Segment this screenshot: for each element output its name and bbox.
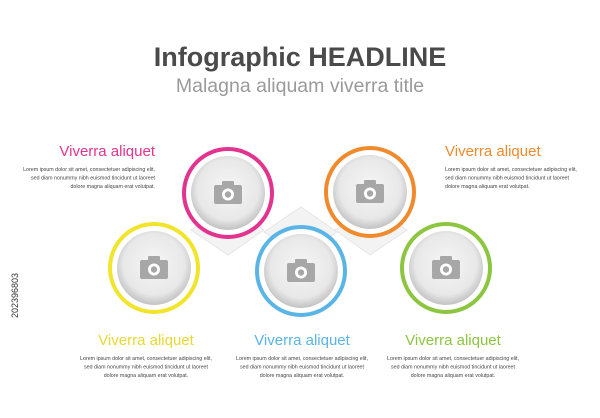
text block: orange bbox=[445, 143, 577, 190]
text block: green: dolore magna aliquam erat volutpat. bbox=[411, 373, 495, 379]
text block: yellow bbox=[80, 332, 212, 379]
text block: pink: Lorem ipsum dolor sit amet, consectetuer adipiscing elit, bbox=[23, 167, 155, 173]
text block: pink bbox=[23, 143, 156, 190]
text block: yellow: Lorem ipsum dolor sit amet, consectetuer adipiscing elit, bbox=[80, 356, 212, 362]
circle: yellow bbox=[110, 224, 198, 312]
circle: pink bbox=[184, 149, 272, 237]
text block: orange: dolore magna aliquam erat volutpat. bbox=[445, 184, 530, 190]
text block: orange: Viverra aliquet bbox=[445, 143, 541, 160]
connector diamonds bbox=[191, 205, 407, 257]
circle: blue bbox=[257, 227, 345, 315]
text block: pink: Viverra aliquet bbox=[59, 143, 156, 160]
text block: blue: sed diam nonummy nibh euismod tincidunt ut laoreet bbox=[240, 364, 365, 370]
text block: blue: Viverra aliquet bbox=[254, 332, 351, 349]
text block: pink: sed diam nonummy nibh euismod tincidunt ut laoreet bbox=[31, 176, 156, 182]
text block: orange: sed diam nonummy nibh euismod tincidunt ut laoreet bbox=[445, 176, 569, 182]
watermark id: 202396803 bbox=[10, 273, 20, 318]
text block: green: Viverra aliquet bbox=[405, 332, 502, 349]
title: Infographic HEADLINE bbox=[154, 42, 446, 72]
text block: yellow: sed diam nonummy nibh euismod tincidunt ut laoreet bbox=[84, 364, 209, 370]
circle: green bbox=[402, 224, 490, 312]
text block: blue: dolore magna aliquam erat volutpat. bbox=[260, 373, 344, 379]
text block: yellow: Viverra aliquet bbox=[98, 332, 195, 349]
text block: orange: Lorem ipsum dolor sit amet, consectetuer adipiscing elit, bbox=[445, 167, 577, 173]
text block: green: Lorem ipsum dolor sit amet, consectetuer adipiscing elit, bbox=[387, 356, 519, 362]
text block: yellow: dolore magna aliquam erat volutpat. bbox=[104, 373, 188, 379]
text block: blue: Lorem ipsum dolor sit amet, consectetuer adipiscing elit, bbox=[236, 356, 368, 362]
subtitle: Malagna aliquam viverra title bbox=[176, 75, 424, 97]
text block: blue bbox=[236, 332, 368, 379]
text block: green: sed diam nonummy nibh euismod tincidunt ut laoreet bbox=[391, 364, 516, 370]
text block: pink: dolore magna aliquam erat volutpat. bbox=[70, 184, 155, 190]
text block: green bbox=[387, 332, 519, 379]
circle: orange bbox=[326, 148, 414, 236]
